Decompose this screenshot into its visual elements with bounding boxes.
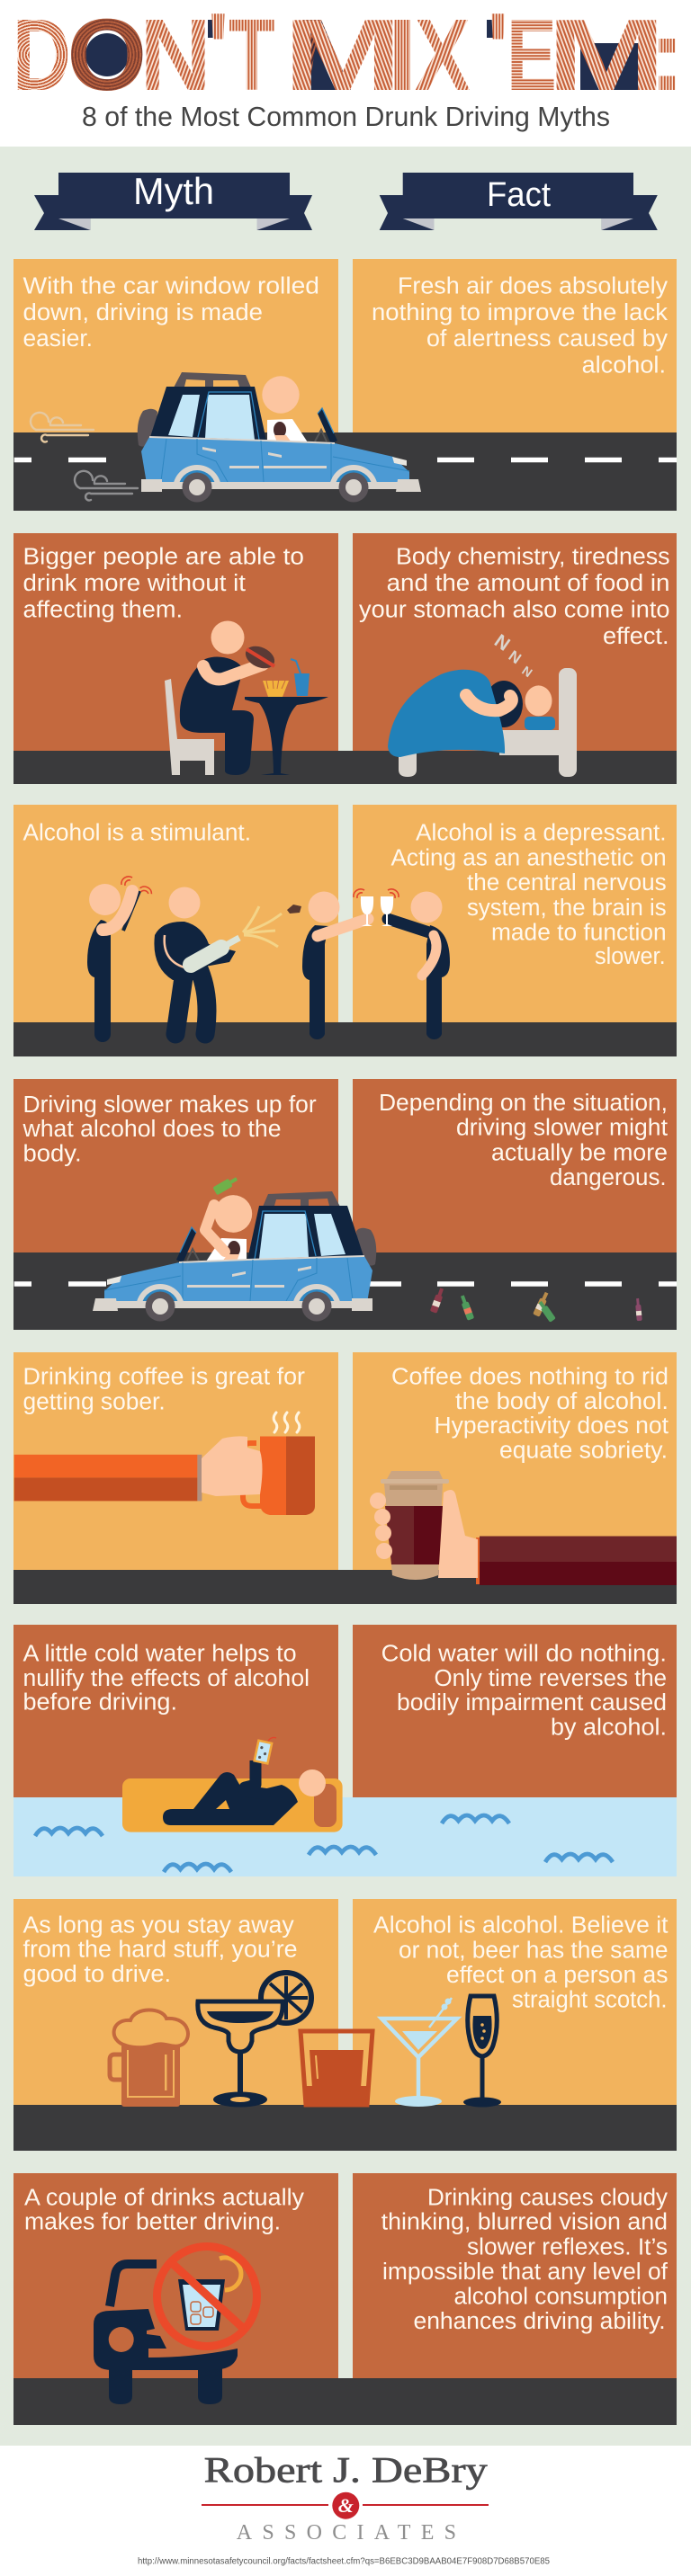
fact text [381,2185,669,2334]
myth text: Drinking coffee is great for [23,1364,306,1389]
myth text: getting sober. [23,1389,166,1414]
myth text: drink more without it [23,571,246,596]
title: M [283,0,402,111]
logo: Robert J. DeBry & Associates: ASSOCIATES [237,2521,456,2545]
fact text [379,1091,668,1190]
myth text: good to drive. [23,1962,171,1987]
fact text: or not, beer has the same [399,1938,668,1963]
fact text: by alcohol. [551,1716,667,1741]
myth text: Driving slower makes up for [23,1092,317,1118]
myth text: down, driving is made [23,300,263,325]
icon: water ripples [35,1815,613,1872]
icon: snore letters: N [490,630,514,655]
fact text: nothing to improve the lack [372,300,668,325]
title: E [507,0,557,111]
icon: wind gusts [31,413,138,500]
myth text: nullify the effects of alcohol [23,1666,310,1691]
fact text [373,1912,668,2013]
fact text: Body chemistry, tiredness [396,545,669,570]
fact text: your stomach also come into [359,597,669,622]
fact text [372,274,668,379]
icon: margarita with citrus slice [198,1973,311,2108]
fact text: actually be more [491,1140,668,1165]
logo: Robert J. DeBry & Associates [202,2450,489,2545]
panel 8: better driving [13,2173,677,2425]
fact text: bodily impairment caused [397,1690,667,1716]
fact text: the central nervous [467,870,667,896]
panel 1: car window [13,259,677,511]
fact text: impossible that any level of [382,2260,669,2285]
fact text: effect on a person as [446,1963,668,1988]
fact text: Fresh air does absolutely [398,274,668,299]
road dashes [14,1281,677,1287]
fact text [390,821,667,969]
road dashes [14,458,677,462]
illustration: man floating on a raft [122,1737,343,1832]
fact text: Acting as an anesthetic on [390,845,667,870]
title: M [547,0,666,111]
icon: champagne flute [463,1996,501,2108]
fact text [359,545,669,649]
fact text: dangerous. [550,1165,667,1190]
fact text: the body of alcohol. [455,1389,669,1414]
title: I [387,0,417,111]
myth text: from the hard stuff, you’re [23,1938,298,1963]
icon: snore letters: N [506,647,525,667]
icon: whisky tumbler [301,2031,372,2105]
title: D [13,0,71,111]
fact text: Alcohol is a depressant. [416,821,667,846]
myth text: A little cold water helps to [23,1641,297,1666]
illustration: man opening champagne [154,887,301,1034]
illustration: two people toasting [302,889,450,1039]
panel 7: hard stuff [13,1899,677,2151]
myth text: affecting them. [23,597,183,622]
title: : [648,0,687,111]
banner: Myth [34,170,312,230]
fact text [381,1641,667,1741]
panel 5: coffee [13,1352,677,1604]
myth text: easier. [23,326,93,352]
title: O [67,0,147,111]
panel 6: cold water [13,1625,677,1876]
icon: car front view [94,2264,238,2404]
illustration: man eating at a table [165,620,328,775]
illustration: dizzy man [87,877,152,1042]
fact text: system, the brain is [467,896,667,921]
fact text [391,1364,669,1464]
panel 4: driving slower [13,1079,677,1330]
fact text: and the amount of food in [387,571,669,596]
title: T [229,0,275,111]
panel 3: stimulant [13,805,677,1056]
myth text [23,274,319,352]
title [13,0,687,111]
icon: snore letters [490,630,535,680]
title: N [139,0,211,111]
logo: Robert J. DeBry & Associates: Robert J. DeBry [204,2450,488,2491]
illustration: empty bottles on the road [430,1288,642,1323]
logo: Robert J. DeBry & Associates: & [338,2494,354,2517]
myth text: Bigger people are able to [23,545,304,570]
fact text: Depending on the situation, [379,1091,668,1116]
illustration: sleeping person in bed [388,630,577,777]
myth text: Alcohol is a stimulant. [23,821,251,846]
fact text: slower. [595,944,666,969]
icon: no-drinking sign [157,2246,257,2347]
fact text: driving slower might [456,1116,668,1141]
icon: steam [274,1413,300,1432]
fact text: Hyperactivity does not [434,1413,669,1439]
fact text: made to function [491,920,667,945]
myth text: As long as you stay away [23,1912,294,1938]
fact text: Only time reverses the [434,1666,667,1691]
myth text [23,1641,310,1716]
fact text: Drinking causes cloudy [427,2185,668,2210]
myth text: body. [23,1141,82,1166]
fact text: straight scotch. [512,1988,668,2013]
myth text: With the car window rolled [23,274,319,299]
icon: snore letters: N [519,663,535,680]
illustration: hand holding takeaway coffee [370,1471,677,1585]
myth text: before driving. [23,1690,177,1716]
myth text [23,1912,298,1987]
fact text: thinking, blurred vision and [381,2209,668,2234]
myth text: what alcohol does to the [22,1117,281,1142]
source url: http://www.minnesotasafetycouncil.org/facts/factsheet.cfm?qs=B6EBC3D9BAAB04E7F908D7D68B570E85 [138,2557,550,2566]
fact text: equate sobriety. [499,1439,668,1464]
fact text: Alcohol is alcohol. Believe it [373,1912,668,1938]
illustration: hand holding coffee mug [14,1413,315,1515]
subtitle: 8 of the Most Common Drunk Driving Myths [82,101,610,132]
fact text: Cold water will do nothing. [381,1641,667,1666]
myth text: makes for better driving. [24,2209,281,2234]
myth text: A couple of drinks actually [24,2185,304,2210]
fact text: effect. [603,624,669,649]
fact text: enhances driving ability. [414,2309,666,2334]
banner: Fact: Fact [487,176,551,214]
fact text: of alertness caused by [426,326,668,352]
banner: Myth: Myth [133,170,214,212]
icon: beer mug [110,2010,188,2107]
myth text [24,2185,304,2234]
fact text: Coffee does nothing to rid [391,1364,669,1389]
illustration: blue car with open window [138,372,421,502]
icon: martini glass [381,1998,457,2107]
fact text: slower reflexes. It’s [467,2234,668,2260]
banner: Fact [380,173,658,230]
myth text [22,1092,317,1166]
panel 2: bigger people [13,533,677,784]
fact text: alcohol. [582,353,666,379]
myth text [23,545,304,622]
fact text: alcohol consumption [453,2284,668,2309]
illustration: man driving slowly with bottle [93,1175,376,1322]
title: X [415,0,471,111]
myth text [23,1364,306,1414]
